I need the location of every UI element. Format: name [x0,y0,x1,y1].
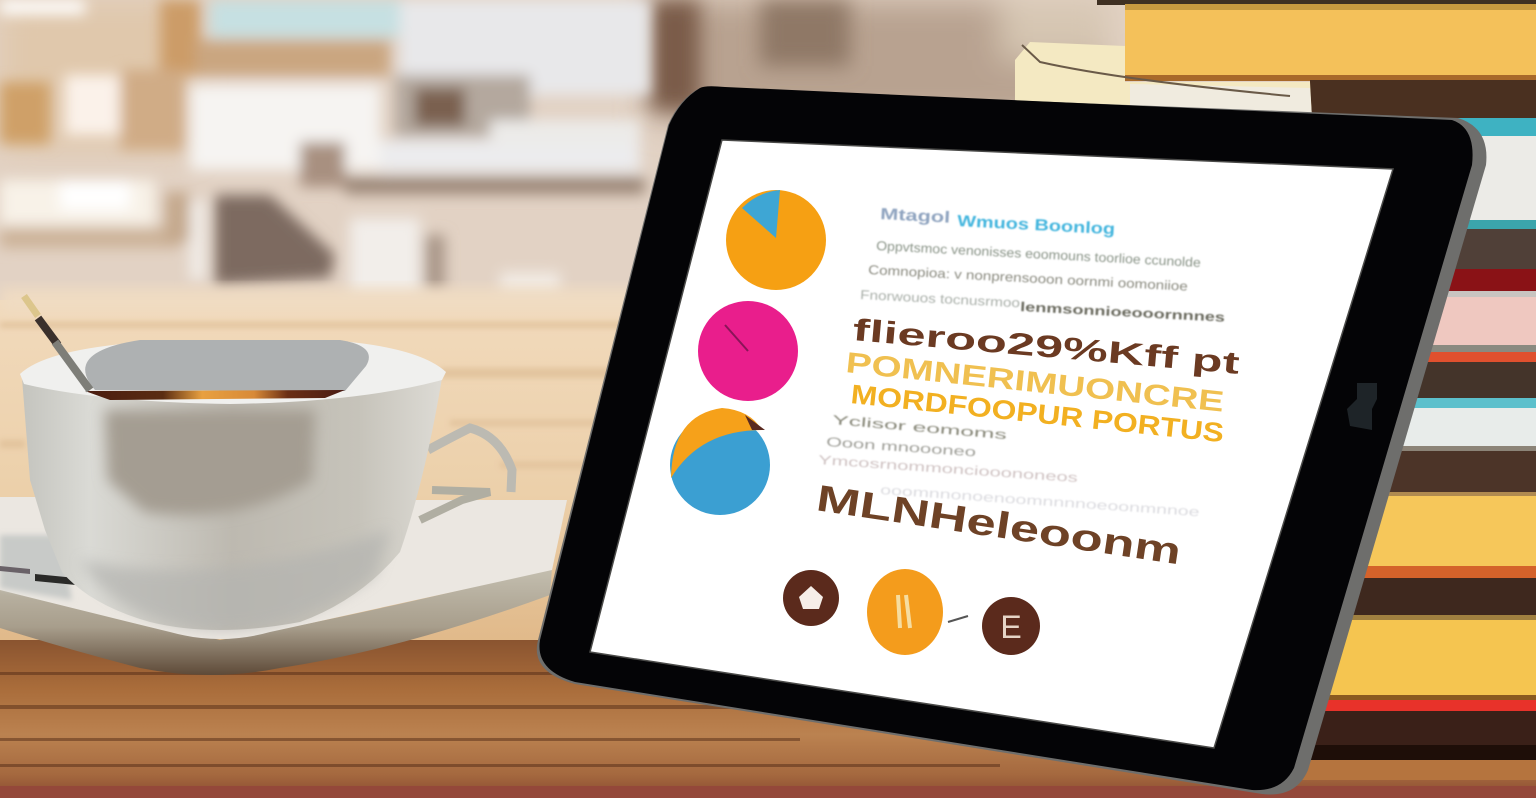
stack of books [1097,0,1536,760]
coffee surface [85,390,345,400]
cup handle [428,428,512,492]
text block: small grey lines: ooomnnonoenoomnnnnoeoonmnnoe [880,482,1200,519]
chart: pink pie [698,301,798,401]
text: yellow headline: MORDFOOPUR PORTUS [849,379,1225,448]
text: brown bottom headline: MLNHeleoonm [814,477,1184,572]
cup handle lower [420,490,490,520]
chart: orange pie [726,190,826,290]
tablet screen [590,140,1393,748]
tablet edge [537,88,1486,794]
icon: brown house circle [783,570,839,626]
text block: grey lines: Comnopioa: v nonprensooon oornmi oomoniioe [868,262,1188,294]
icon: orange circle [867,569,943,655]
tablet body [539,86,1473,790]
table surface [0,288,680,650]
wooden desk foreground [0,640,1536,798]
text block: grey lines [860,238,1225,325]
heading: title line: Mtagol [880,206,951,227]
paper note behind tablet [1015,42,1312,118]
heading: title line [880,206,1115,238]
icon: brown letter circle [982,597,1040,655]
text: brown numbers line: flieroo29%Kff pt [851,312,1241,381]
icon: dash connector [948,616,968,622]
text block: small grey lines: Yclisor eomoms [832,412,1008,442]
tablet [537,86,1486,794]
text block: small grey lines: Ymcosrnommonciooononeos [818,452,1079,485]
text block: grey lines: Fnorwouos tocnusrmoo [860,287,1020,310]
cup body [22,378,442,630]
text: yellow headline: POMNERIMUONCRE [844,347,1226,419]
text block: small grey lines [818,412,1200,519]
text: yellow headline [844,347,1226,448]
saucer [0,497,567,675]
text block: grey lines: Oppvtsmoc venonisses eoomouns toorlioe ccunolde [876,238,1201,270]
spoon [24,296,90,390]
blurred background [0,0,1536,310]
heading: title line: Wmuos Boonlog [957,213,1115,238]
chart: blue and orange pie [670,408,770,515]
tablet side button [1347,383,1377,430]
cup rim [20,340,446,404]
coffee cup [20,296,512,630]
text block: small grey lines: Ooon mnoooneo [826,434,976,459]
icon: brown letter circle: E [1000,609,1022,645]
text block: grey lines: lenmsonnioeooornnnes [1020,299,1225,325]
